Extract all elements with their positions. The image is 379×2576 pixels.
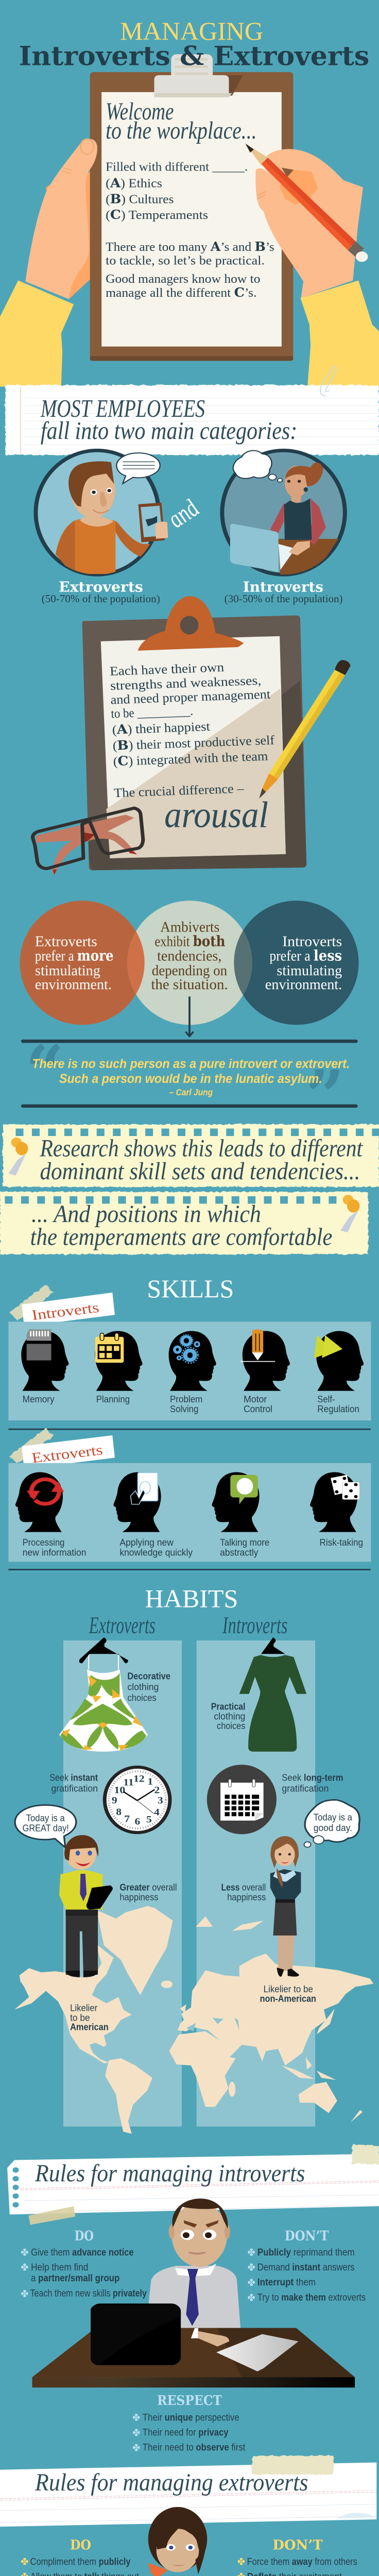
practical paragraph: manage all the different C’s. [106,285,256,300]
text: less happiness [221,1883,266,1903]
practical paragraph [106,240,274,300]
respect heading: RESPECT [157,2392,222,2408]
clipboard text: (A) their happiest [112,719,211,737]
tape two [10,1428,53,1464]
text: greater happiness: happiness [119,1892,158,1903]
manager woman [142,2507,213,2576]
skill: applying new knowledge: knowledge quickly [119,1548,193,1558]
don't list [248,2247,366,2303]
heading: skills: SKILLS [147,1274,234,1303]
quote panel: “ [25,1030,64,1113]
venn text: introverts [265,934,342,993]
introvert figure [270,1836,301,1977]
skill: self-regulation: Self- [317,1394,335,1405]
quote panel: Such a person would be in the lunatic asylum. [59,1071,322,1086]
icon: clock: 9 [112,1795,117,1806]
icon: calendar [207,1765,277,1834]
clipboard text [109,660,275,800]
clipboard text: strengths and weaknesses, [110,673,262,693]
label: introverts: (30-50% of the population) [225,593,343,605]
map label: non-american: non-American [260,1994,316,2004]
do list: Give them advance notice [31,2247,134,2258]
don't list: Force them away from others [247,2556,357,2567]
icon: clock: 5 [146,1815,152,1825]
respect list: Their need to observe first [143,2442,246,2453]
venn text: extroverts: prefer a more [35,947,114,964]
do list [21,2556,139,2576]
extrovert figure [59,1835,113,1977]
venn text: extroverts: stimulating [35,962,100,978]
icon: clock: 10 [114,1785,125,1795]
decorative dress [59,1637,148,1752]
section: arousal [20,660,359,1025]
icon: clock: 8 [116,1807,122,1817]
manager figure [149,2198,240,2328]
label: introverts: Introverts [243,579,323,596]
map label: american [70,2003,109,2032]
icon: clock: 7 [124,1814,130,1824]
do heading: DO [70,2537,91,2553]
map label: american: Likelier [70,2003,97,2013]
skill: talking abstractly [212,1472,269,1558]
world map [14,1906,373,2134]
label: extroverts: (50-70% of the population) [42,593,160,605]
section: introduction with clipboard [0,16,379,387]
practical dress [239,1637,306,1752]
tape right [352,2144,379,2164]
skill: applying new knowledge: Applying new [119,1538,174,1548]
practical paragraph: Good managers know how to [106,272,261,285]
pencil [245,143,368,262]
question list: (A) Ethics [106,176,162,191]
venn text: introverts: prefer a less [269,947,342,964]
skill: motor control [240,1329,290,1415]
tape [252,2455,334,2475]
speech bubble: great day: Today is a [26,1813,65,1824]
do list: Compliment them publicly [30,2556,131,2567]
speech bubble: great day [15,1805,76,1848]
skill: problem solving: Problem [170,1394,202,1405]
speech bubble [116,453,160,484]
skill: planning: Planning [96,1394,130,1405]
venn text: ambiverts [151,919,228,993]
text: less happiness: happiness [227,1892,266,1903]
extrovert portrait [36,450,159,574]
text: instant gratification: gratification [51,1784,98,1794]
icon: clock: 2 [154,1785,160,1795]
label: introverts [225,579,343,605]
text: practical clothing: choices [217,1721,245,1732]
don't list: Demand instant answers [257,2262,355,2273]
venn text: introverts: stimulating [277,962,342,978]
practical paragraph: to tackle, so let’s be practical. [106,253,265,267]
don't list: Interrupt them [257,2277,316,2288]
clipboard [90,54,293,361]
left sleeve [0,280,74,387]
venn text: ambiverts: exhibit both [154,933,225,950]
section: introvert rules and manager [0,2198,376,2576]
quote panel: ” [306,1055,344,1138]
handwritten welcome: Welcome [106,98,174,125]
respect list: Their unique perspective [143,2412,239,2423]
text: greater happiness: Greater overall [119,1883,177,1893]
do list [21,2247,147,2299]
clipboard text: The crucial difference – [113,781,245,800]
venn text: ambiverts: the situation. [151,976,228,993]
skill: problem solving [169,1331,216,1415]
text: decorative clothing: Decorative [127,1671,170,1682]
venn text: introverts: environment. [265,976,342,993]
icon: pushpin left [8,1138,28,1176]
handwritten welcome: to the workplace... [106,117,256,144]
map label: american: to be [70,2013,90,2023]
tape left [28,2206,75,2225]
don't list [238,2556,357,2576]
question list [106,160,248,223]
don't heading: DON’T [272,2537,323,2553]
thought cloud: good day: good day. [314,1823,352,1833]
text: long-term gratification [282,1773,343,1794]
column heading: extroverts: Extroverts [89,1612,156,1638]
venn text: ambiverts: tendencies, [157,948,221,964]
tag: introverts: Introverts [30,1299,100,1324]
tag: introverts [22,1293,115,1326]
tape [10,1285,53,1320]
skill: talking abstractly: abstractly [220,1548,258,1558]
skill: talking abstractly: Talking more [220,1538,269,1548]
section: rules for introverts [7,1985,379,2244]
text: greater happiness [119,1883,177,1903]
skill: processing new information: new information [23,1548,87,1558]
text: instant gratification: Seek instant [49,1773,98,1783]
question list: (B) Cultures [106,192,174,207]
icon: clock: 6 [134,1817,140,1827]
clipboard text: (C) integrated with the team [113,749,268,769]
skill: self-regulation: Regulation [317,1404,359,1415]
quote panel: – Carl Jung [169,1088,213,1097]
skill: memory [21,1329,68,1405]
do heading: DO [75,2228,94,2244]
icon: pushpin right [340,1195,359,1232]
note: positions [0,1192,368,1254]
thought cloud: good day [304,1800,359,1848]
thought cloud: good day: Today is a [314,1812,353,1823]
question list: (C) Temperaments [106,208,208,223]
skill: processing new information: Processing [23,1538,64,1548]
clipboard text: (B) their most productive self [112,733,275,753]
divider bar [8,1429,371,1430]
text: less happiness: Less overall [221,1883,266,1893]
torn white paper [7,2154,379,2214]
and: and [161,495,205,533]
icon: clock: 4 [154,1807,160,1818]
heading: most employees [40,395,297,445]
don't list: Publicly reprimand them [257,2247,355,2258]
text: practical clothing: Practical [211,1702,245,1712]
icon: clock: 3 [158,1795,163,1806]
heading: habits: HABITS [145,1584,238,1613]
map label: non-american [260,1985,316,2004]
venn text: ambiverts: Ambiverts [160,919,219,935]
speech bubble: great day: GREAT day! [23,1823,69,1834]
practical paragraph: There are too many A’s and B’s [106,240,274,254]
skill: applying new knowledge [113,1472,193,1558]
icon: paper clip [320,366,336,396]
respect list: Their need for privacy [143,2427,229,2438]
icon: clock: 11 [123,1777,134,1788]
skill: motor control: Control [244,1404,272,1415]
heading: rules extroverts: Rules for managing extroverts [35,2469,308,2496]
text: decorative clothing: clothing [127,1682,159,1692]
left hand [25,139,97,299]
don't list: Try to make them extroverts [257,2292,366,2303]
tilted clipboard with question [82,596,306,870]
skill: risk-taking: Risk-taking [320,1538,363,1548]
text: long-term gratification: Seek long-term [282,1773,343,1783]
venn text: extroverts: environment. [35,976,112,993]
skill: processing new information [15,1472,87,1558]
section: two main categories [3,366,379,870]
right hand [255,149,363,298]
do list: Help them find [31,2262,88,2273]
text: instant gratification [49,1773,98,1794]
introvert portrait [222,450,345,575]
section: quote and research notes [0,996,379,1303]
venn circles [20,901,359,1025]
skill: memory: Memory [23,1394,55,1405]
do list: a partner/small group [31,2273,119,2284]
text: practical clothing: clothing [214,1711,245,1722]
skill: problem solving: Solving [170,1404,198,1415]
do list: Teach them new skills privately [30,2288,147,2299]
handwritten arousal: arousal [164,794,268,836]
paper strip [0,2463,376,2527]
eyeglasses [32,808,143,875]
question list: Filled with different _____. [106,160,248,174]
text: practical clothing [211,1702,245,1732]
icon: clock: 12 [133,1774,145,1784]
icon: clock: 1 [147,1777,153,1787]
right sleeve [300,280,379,387]
note: research shows [3,1125,379,1187]
yellow pencil [259,660,351,799]
text: long-term gratification: gratification [282,1784,329,1794]
clipboard text: Each have their own [109,660,225,679]
panel: extrovert skills [8,1463,371,1562]
quote panel [21,1030,358,1138]
venn text: extroverts: Extroverts [35,934,97,950]
label: extroverts: Extroverts [59,579,143,596]
map label: non-american: Likelier to be [264,1985,313,1995]
thought cloud [233,451,282,482]
skill: self-regulation [314,1331,364,1415]
heading: most employees: MOST EMPLOYEES [40,395,205,422]
skill: risk-taking [310,1472,363,1548]
divider bar two [8,1569,371,1570]
clipboard text: and need proper management [110,687,271,707]
panel: introvert skills [8,1321,371,1420]
tag: extroverts [22,1435,115,1469]
don't heading: DON’T [285,2228,329,2244]
section: skills [8,1285,371,1638]
smartphone in hand [138,503,168,543]
venn text: extroverts [35,934,114,993]
note: positions: ... And positions in which [31,1201,261,1228]
handwritten welcome [106,98,256,144]
venn text: ambiverts: depending on [152,962,227,978]
column heading: introverts: Introverts [222,1612,288,1638]
clipboard text: to be _________. [111,704,194,721]
label: extroverts [42,579,160,605]
skill: motor control: Motor [244,1394,267,1405]
arrow [185,996,194,1036]
icon: clock [105,1767,170,1833]
skill: planning [95,1331,143,1405]
section: habits items [15,1637,359,1977]
torn notebook paper [3,385,379,455]
respect list [133,2412,246,2453]
desk with laptop [32,2303,355,2387]
text: decorative clothing: choices [127,1693,157,1703]
title: Managing: MANAGING [120,16,263,45]
text: decorative clothing [127,1671,170,1703]
tag: extroverts: Extroverts [30,1442,104,1466]
venn text: introverts: Introverts [282,934,342,950]
map label: american: American [70,2022,109,2032]
habit columns [63,1640,315,2127]
heading: rules introverts: Rules for managing introverts [35,2160,305,2187]
